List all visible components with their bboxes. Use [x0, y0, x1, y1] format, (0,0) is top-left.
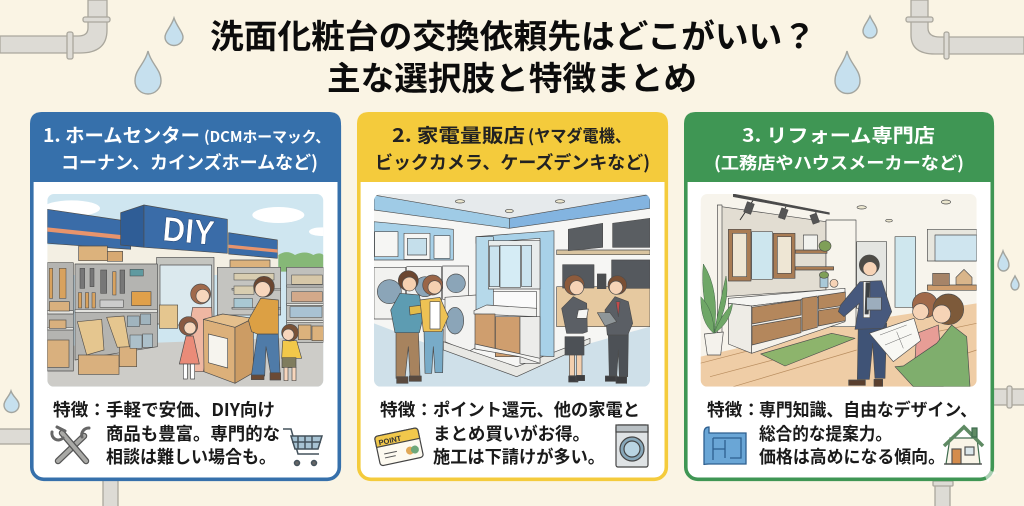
- water drops: [4, 16, 1019, 413]
- panel 3 header: [684, 112, 994, 182]
- text: panel 3 features: 総合的な提案力。: [759, 421, 892, 446]
- panel 1 header: [30, 112, 341, 182]
- icon: point card: [374, 428, 424, 466]
- text: panel 1 features: 商品も豊富。専門的な: [106, 421, 280, 446]
- panel 3 header: 3. リフォーム専門店: [742, 121, 935, 148]
- text: panel 2 features: 特徴：: [380, 397, 433, 422]
- text: panel 3 features: [707, 397, 977, 469]
- text: panel 3 features: 特徴：: [707, 397, 760, 422]
- icon: point card: POINT: [378, 434, 402, 447]
- icon: shopping cart: [283, 429, 322, 466]
- text: panel 3 features: 価格は高めになる傾向。: [759, 444, 945, 469]
- illustration: DIY store with family: [43, 194, 334, 387]
- text: panel 2 features: まとめ買いがお得。: [433, 421, 590, 446]
- panel 1 header: コーナン、カインズホームなど): [61, 149, 318, 175]
- icon: crossed wrenches: [52, 427, 89, 461]
- icon: house: [944, 427, 983, 464]
- illustration: DIY store with family: DIY: [161, 211, 216, 253]
- panel 1 header: (DCMホーマック、: [204, 126, 330, 147]
- title: 洗面化粧台の交換依頼先はどこがいい？: [210, 10, 816, 58]
- text: panel 2 features: [380, 397, 640, 469]
- panel 2 header: [357, 112, 668, 182]
- text: panel 3 features: 専門知識、自由なデザイン、: [759, 397, 977, 422]
- icon: washing machine: [616, 425, 648, 467]
- panel 1 header: 1. ホームセンター: [43, 121, 200, 148]
- illustration: remodel showroom consultation: [700, 194, 977, 387]
- text: panel 2 features: ポイント還元、他の家電と: [433, 397, 640, 422]
- panel: remodeling specialist: [684, 112, 997, 483]
- panel 3 header: (工務店やハウスメーカーなど): [714, 149, 964, 174]
- panel 2 header: (ヤマダ電機、: [528, 122, 631, 147]
- text: panel 2 features: 施工は下請けが多い。: [433, 444, 605, 469]
- panel: home center: [30, 112, 341, 479]
- panel: electronics store: [357, 112, 668, 479]
- text: panel 1 features: 特徴：: [53, 397, 106, 422]
- panel 2 header: 2. 家電量販店: [392, 121, 525, 148]
- text: panel 1 features: 手軽で安価、DIY向け: [106, 397, 275, 422]
- text: panel 1 features: [53, 397, 280, 469]
- icon: blueprint: [704, 427, 746, 465]
- text: panel 1 features: 相談は難しい場合も。: [106, 444, 276, 469]
- panel 2 header: ビックカメラ、ケーズデンキなど): [375, 149, 650, 175]
- illustration: appliance showroom with staff: [374, 194, 650, 387]
- title: 主な選択肢と特徴まとめ: [327, 52, 697, 100]
- title: [210, 10, 816, 100]
- watermark glint: [979, 464, 997, 483]
